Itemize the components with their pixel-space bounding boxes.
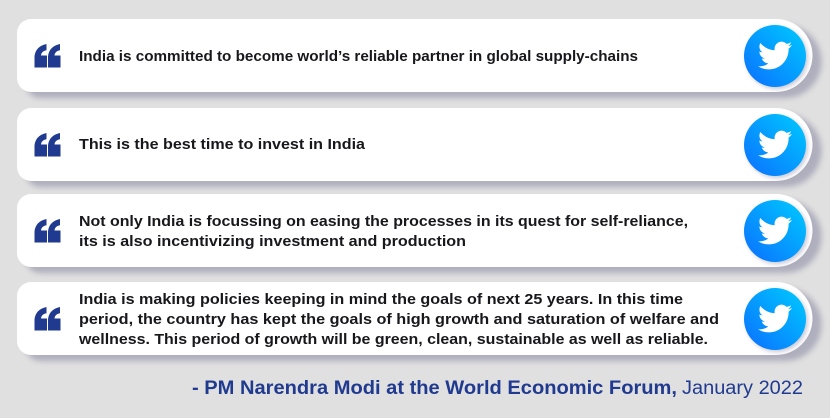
quote text: This is the best time to invest in India	[79, 136, 366, 153]
icon: twitter badge	[744, 288, 808, 352]
quote text line 3: wellness. This period of growth will be green, clean, sustainable as well as reliable.	[78, 331, 708, 348]
icon: opening quote mark	[34, 133, 60, 156]
icon: twitter badge	[744, 200, 808, 264]
icon: opening quote mark	[34, 307, 60, 330]
panel: quote 4	[17, 282, 821, 361]
attribution: January 2022	[682, 378, 803, 399]
quote text line 2: its is also incentivizing investment and production	[79, 233, 466, 250]
icon: twitter badge	[744, 114, 808, 178]
attribution: - PM Narendra Modi at the World Economic Forum,	[192, 378, 677, 399]
panel: quote 2	[17, 108, 821, 187]
icon: opening quote mark	[34, 44, 60, 68]
quote text: India is committed to become world’s reliable partner in global supply-chains	[79, 48, 638, 65]
icon: opening quote mark	[34, 219, 60, 242]
panel: quote 3	[17, 194, 821, 273]
quote text: Not only India is focussing on easing the processes in its quest for self-reliance,	[79, 213, 688, 230]
quote text: India is making policies keeping in mind the goals of next 25 years. In this time	[79, 291, 683, 308]
icon: twitter badge	[744, 25, 808, 89]
panel: quote 1	[17, 19, 821, 98]
quote text line 2: period, the country has kept the goals of high growth and saturation of welfare and	[79, 311, 719, 328]
